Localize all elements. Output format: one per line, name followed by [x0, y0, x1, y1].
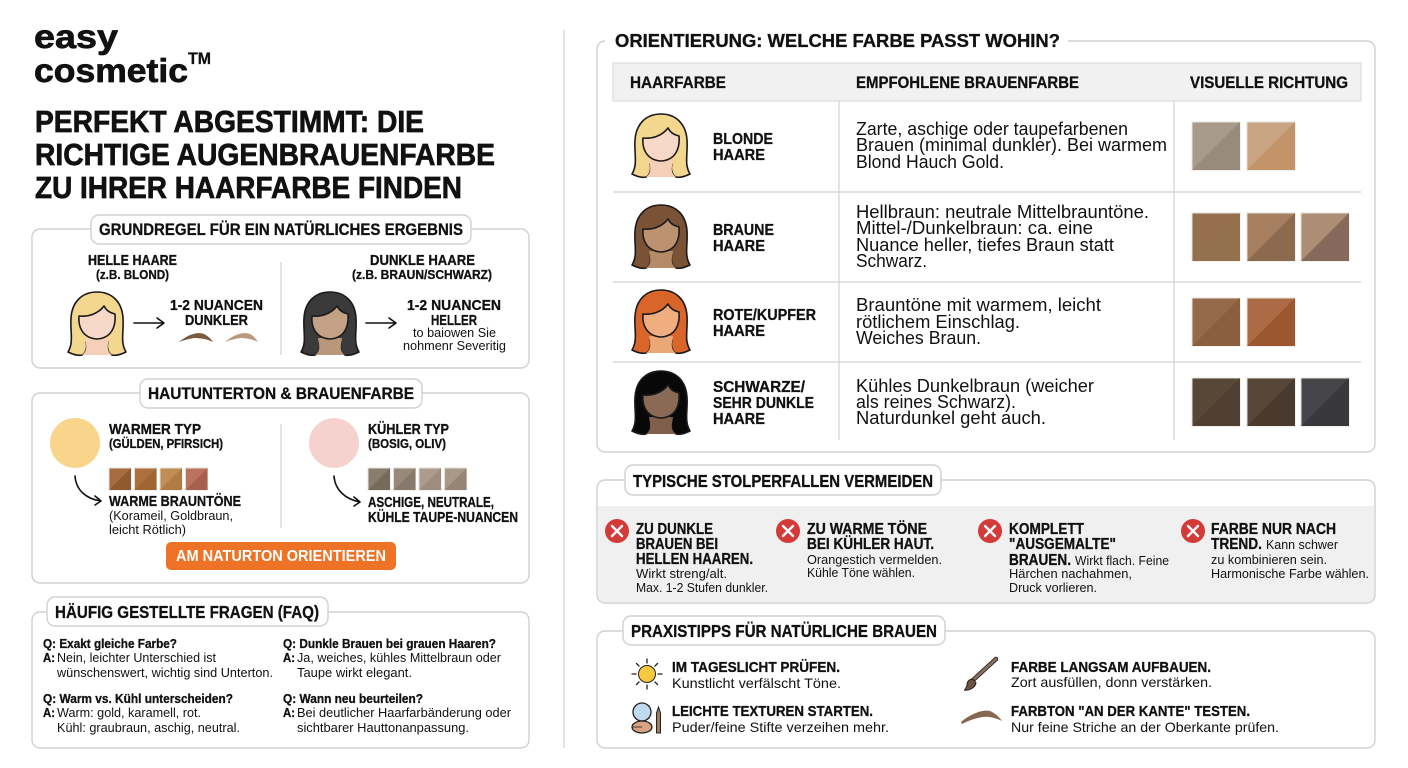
text: dunkle Haare: (z.B. BRAUN/SCHWARZ)	[352, 268, 492, 282]
text: 1-2 Nuancen heller: to baiowen Sie	[413, 326, 496, 340]
text: 1-2 Nuancen dunkler: DUNKLER	[185, 312, 248, 329]
description: Schwarz.	[856, 251, 927, 271]
label: SEHR DUNKLE	[713, 395, 814, 412]
text: Wirkt flach. Feine	[1075, 553, 1169, 568]
table header: EMPFOHLENE BRAUENFARBE	[856, 73, 1079, 92]
text: helle Haare: (z.B. BLOND)	[96, 268, 169, 282]
heading: Stolperfallen: TYPISCHE STOLPERFALLEN VERMEIDEN	[633, 471, 933, 491]
faq item 2: A:	[43, 706, 55, 720]
pitfall 4	[1181, 519, 1369, 581]
icon: x	[1181, 519, 1205, 543]
description: Brauen (minimal dunkler). Bei warmem	[856, 135, 1167, 155]
text: 1-2 Nuancen heller: HELLER	[431, 312, 477, 329]
heading: Grundregel: GRUNDREGEL FÜR EIN NATÜRLICHES ERGEBNIS	[99, 220, 463, 239]
tip: an der Kante: FARBTON "AN DER KANTE" TESTEN.	[1011, 703, 1250, 720]
text: Max. 1-2 Stufen dunkler.	[636, 580, 768, 595]
faq item 2: Warm: gold, karamell, rot.	[57, 706, 201, 720]
description: Brauntöne mit warmem, leicht	[856, 295, 1101, 315]
swatches	[1192, 122, 1295, 170]
icon: x	[605, 519, 629, 543]
panel: Hautunterton	[32, 379, 529, 583]
description: rötlichem Einschlag.	[856, 312, 1020, 332]
text: warmer Typ: WARMER TYP	[109, 422, 201, 438]
row: blonde Haare	[632, 114, 1295, 177]
faq item 3: Q: Dunkle Brauen bei grauen Haaren?	[283, 637, 496, 651]
text: Härchen nachahmen,	[1009, 566, 1132, 581]
text: 1-2 Nuancen dunkler: 1-2 NUANCEN	[170, 297, 263, 314]
label	[713, 379, 814, 428]
text: FARBE NUR NACH	[1211, 521, 1336, 538]
icon: eyebrow	[961, 711, 1002, 724]
tip: an der Kante: Nur feine Striche an der Oberkante prüfen.	[1011, 719, 1279, 735]
tip: an der Kante	[1011, 703, 1279, 735]
arrow: warm	[75, 476, 101, 505]
swatches	[1192, 213, 1349, 261]
faq item 4: Bei deutlicher Haarfarbänderung oder	[297, 706, 511, 720]
logo	[34, 18, 211, 89]
label: HAARE	[713, 238, 765, 255]
text: HELLEN HAAREN.	[636, 551, 753, 568]
heading: Hautunterton: HAUTUNTERTON & BRAUENFARBE	[148, 384, 414, 403]
heading: Stolperfallen	[625, 465, 941, 495]
row: rote Haare	[632, 290, 1295, 353]
logo: TM	[188, 49, 211, 68]
faq item 4: A:	[283, 706, 295, 720]
panel: Stolperfallen	[597, 465, 1375, 603]
icon: blonde head	[632, 114, 690, 177]
tip: Texturen: Puder/feine Stifte verzeihen mehr.	[672, 719, 889, 735]
swatches: cool	[368, 468, 466, 490]
logo: easy	[34, 18, 119, 55]
tip: Farbe aufbauen: Zort ausfüllen, donn verstärken.	[1011, 674, 1212, 690]
text: warme Brauntöne: WARME BRAUNTÖNE	[109, 493, 241, 510]
description: Nuance heller, tiefes Braun statt	[856, 235, 1114, 255]
text	[1211, 521, 1369, 581]
text: aschige Nuancen: ASCHIGE, NEUTRALE,	[368, 495, 494, 511]
text: Wirkt streng/alt.	[636, 566, 727, 581]
text: ZU WARME TÖNE	[807, 521, 927, 538]
faq item 1: Nein, leichter Unterschied ist	[57, 651, 217, 665]
text: 1-2 Nuancen heller	[403, 297, 506, 353]
text	[807, 521, 942, 580]
title: PERFEKT ABGESTIMMT: DIE	[35, 104, 424, 139]
text: Kann schwer	[1266, 537, 1339, 552]
title: RICHTIGE AUGENBRAUENFARBE	[35, 137, 495, 172]
text: 1-2 Nuancen heller: 1-2 NUANCEN	[407, 297, 501, 314]
text	[1009, 521, 1169, 595]
icon: black head	[632, 371, 690, 434]
text: BEI KÜHLER HAUT.	[807, 536, 934, 553]
row: schwarze Haare	[632, 371, 1349, 434]
text: warme Brauntöne: leicht Rötlich)	[109, 522, 186, 537]
text: warmer Typ: (GÜLDEN, PFIRSICH)	[109, 436, 223, 451]
panel: FAQ	[32, 597, 529, 748]
icon: blonde head	[68, 292, 126, 355]
text: aschige Nuancen	[368, 495, 518, 526]
label: HAARE	[713, 323, 765, 340]
description: Kühles Dunkelbraun (weicher	[856, 376, 1094, 396]
heading: Praxistipps: PRAXISTIPPS FÜR NATÜRLICHE BRAUEN	[631, 621, 937, 641]
heading: FAQ: HÄUFIG GESTELLTE FRAGEN (FAQ)	[55, 602, 319, 622]
pitfall 2	[776, 519, 942, 580]
label: BLONDE	[713, 131, 773, 148]
text: "AUSGEMALTE"	[1009, 536, 1116, 553]
text: Orangestich vermelden.	[807, 552, 942, 567]
faq item 2	[43, 692, 240, 735]
gray band	[598, 506, 1374, 602]
faq item 2: Kühl: graubraun, aschig, neutral.	[57, 721, 240, 735]
faq item 4: Q: Wann neu beurteilen?	[283, 692, 423, 706]
icon: warm circle	[50, 418, 100, 468]
arrow: to lighter	[366, 318, 396, 328]
text: KOMPLETT	[1009, 521, 1084, 538]
table header: VISUELLE RICHTUNG	[1190, 73, 1348, 92]
divider	[563, 30, 565, 748]
logo: cosmetic	[34, 52, 188, 89]
tip: Texturen: LEICHTE TEXTUREN STARTEN.	[672, 703, 873, 720]
icon: x	[776, 519, 800, 543]
icon: compact and pencil	[632, 703, 660, 733]
swatches	[1192, 298, 1295, 346]
text: 1-2 Nuancen heller: nohmenr Severitig	[403, 339, 506, 353]
faq item 3: Taupe wirkt elegant.	[297, 666, 412, 680]
text: dunkle Haare	[352, 253, 492, 282]
heading: Grundregel	[91, 215, 471, 244]
text: kühler Typ	[368, 421, 449, 451]
faq item 3: A:	[283, 651, 295, 665]
text: warmer Typ	[109, 422, 223, 451]
label: HAARE	[713, 147, 765, 164]
pitfall 3	[978, 519, 1169, 595]
faq item 1: A:	[43, 651, 55, 665]
tip: Farbe aufbauen	[1011, 659, 1212, 690]
row: braune Haare	[632, 202, 1349, 271]
faq item 1: Q: Exakt gleiche Farbe?	[43, 637, 177, 651]
icon: x	[978, 519, 1002, 543]
description: Zarte, aschige oder taupefarbenen	[856, 119, 1128, 139]
text: zu kombinieren sein.	[1211, 552, 1327, 567]
heading: Orientierung: ORIENTIERUNG: WELCHE FARBE PASST WOHIN?	[615, 30, 1060, 51]
description: Mittel-/Dunkelbraun: ca. eine	[856, 218, 1093, 238]
text: Druck vorlieren.	[1009, 580, 1097, 595]
divider	[280, 262, 282, 355]
description	[856, 295, 1101, 348]
text: warme Brauntöne: (Korameil, Goldbraun,	[109, 508, 233, 523]
description: Hellbraun: neutrale Mittelbrauntöne.	[856, 202, 1149, 222]
tip: Farbe aufbauen: FARBE LANGSAM AUFBAUEN.	[1011, 659, 1211, 676]
faq item 4: sichtbarer Hauttonanpassung.	[297, 721, 469, 735]
panel: Praxistipps	[597, 616, 1375, 748]
panel: Orientierung	[597, 30, 1375, 452]
description	[856, 376, 1094, 428]
icon: sun	[632, 659, 662, 689]
faq item 1	[43, 637, 273, 680]
label: HAARE	[713, 411, 765, 428]
title	[35, 104, 495, 205]
faq item 3	[283, 637, 501, 680]
text: BRAUEN BEI	[636, 536, 718, 553]
text: helle Haare	[88, 253, 177, 282]
swatches	[1192, 378, 1349, 426]
table header: HAARFARBE	[630, 73, 726, 92]
faq item 4	[283, 692, 511, 735]
icon: dark head	[301, 292, 359, 355]
label	[713, 222, 774, 255]
description: Blond Hauch Gold.	[856, 152, 1004, 172]
text: TREND.	[1211, 536, 1262, 553]
button: am Naturton orientieren: AM NATURTON ORIENTIEREN	[176, 548, 386, 565]
faq item 3: Ja, weiches, kühles Mittelbraun oder	[297, 651, 501, 665]
text	[636, 521, 768, 595]
tip: Tageslicht: IM TAGESLICHT PRÜFEN.	[672, 659, 840, 676]
heading: Hautunterton	[140, 379, 422, 408]
description	[856, 119, 1167, 172]
pitfall 1	[605, 519, 768, 595]
icon: brown head	[632, 205, 690, 268]
swatches: warm	[109, 468, 208, 490]
text: Harmonische Farbe wählen.	[1211, 566, 1369, 581]
divider	[280, 424, 282, 528]
text: Kühle Töne wählen.	[807, 565, 915, 580]
arrow: to darker	[134, 318, 164, 328]
heading: Praxistipps	[623, 616, 945, 645]
table grid	[613, 101, 1361, 440]
text: dunkle Haare: DUNKLE HAARE	[370, 253, 475, 269]
label	[713, 131, 773, 164]
text: ZU DUNKLE	[636, 521, 713, 538]
label: ROTE/KUPFER	[713, 307, 816, 324]
title: ZU IHRER HAARFARBE FINDEN	[35, 170, 462, 205]
icon: brush	[964, 659, 996, 690]
text: BRAUEN.	[1009, 552, 1071, 569]
heading: FAQ	[47, 597, 328, 626]
panel: Grundregel	[32, 215, 529, 368]
description: Weiches Braun.	[856, 328, 981, 348]
button: am Naturton orientieren	[166, 542, 396, 570]
faq item 1: wünschenswert, wichtig sind Unterton.	[56, 666, 273, 680]
tip: Tageslicht	[672, 659, 841, 691]
description: als reines Schwarz).	[856, 392, 1016, 412]
text: aschige Nuancen: KÜHLE TAUPE-NUANCEN	[368, 509, 518, 526]
text: helle Haare: HELLE HAARE	[88, 253, 177, 269]
text: warme Brauntöne	[109, 493, 241, 537]
text: 1-2 Nuancen dunkler	[170, 297, 263, 329]
label: SCHWARZE/	[713, 379, 806, 396]
icon: red head	[632, 290, 690, 353]
icon: eyebrows	[179, 333, 258, 342]
tip: Tageslicht: Kunstlicht verfälscht Töne.	[672, 675, 841, 691]
description: Naturdunkel geht auch.	[856, 408, 1046, 428]
icon: cool circle	[309, 418, 359, 468]
label	[713, 307, 816, 340]
tip: Texturen	[672, 703, 889, 735]
arrow: cool	[334, 476, 360, 506]
label: BRAUNE	[713, 222, 774, 239]
table header	[613, 63, 1361, 101]
text: kühler Typ: (BOSIG, OLIV)	[368, 437, 446, 451]
description	[856, 202, 1149, 271]
text: kühler Typ: KÜHLER TYP	[368, 421, 449, 438]
faq item 2: Q: Warm vs. Kühl unterscheiden?	[43, 692, 233, 706]
